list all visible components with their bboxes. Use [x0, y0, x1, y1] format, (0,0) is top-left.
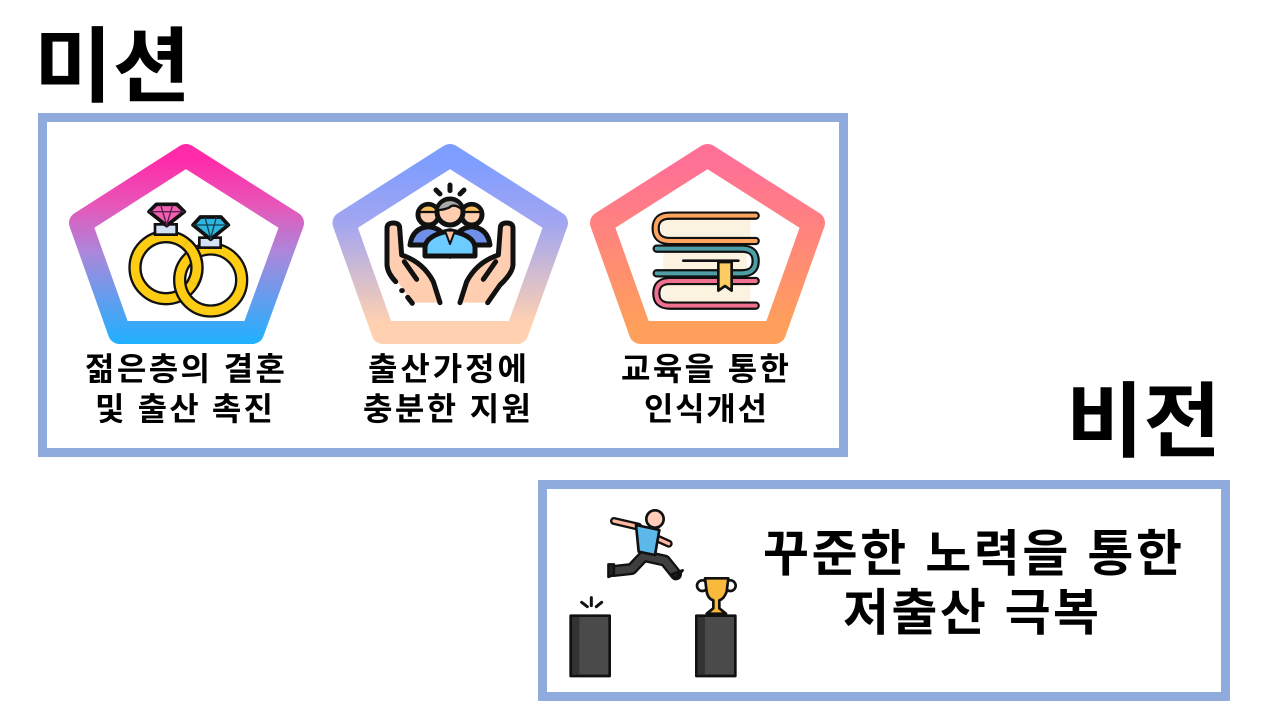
pentagon: marriage [80, 156, 292, 427]
panel: vision [542, 484, 1226, 696]
label: family support: 출산가정에 [368, 351, 527, 387]
icon: wedding rings [135, 204, 242, 311]
icon: runner leaping to trophy [571, 510, 736, 676]
icon: stack of books [656, 216, 756, 306]
label: education [621, 351, 789, 427]
panel: mission [42, 118, 844, 452]
text: vision statement: 꾸준한 노력을 통한 [763, 526, 1182, 582]
pentagon: family support [344, 156, 556, 427]
text: vision statement: 저출산 극복 [843, 585, 1099, 641]
label: education: 인식개선 [644, 391, 767, 427]
pentagon: education [602, 156, 814, 427]
label: education: 교육을 통한 [621, 351, 789, 387]
label: family support [363, 351, 531, 427]
icon: hands holding people [387, 185, 513, 303]
label: marriage: 젊은층의 결혼 [85, 351, 285, 387]
text: vision statement [763, 526, 1182, 641]
title: 미션: 미션 [34, 22, 191, 113]
label: family support: 충분한 지원 [363, 391, 531, 427]
title: 비전: 비전 [1066, 377, 1221, 468]
label: marriage: 및 출산 촉진 [95, 391, 273, 427]
label: marriage [85, 351, 285, 427]
